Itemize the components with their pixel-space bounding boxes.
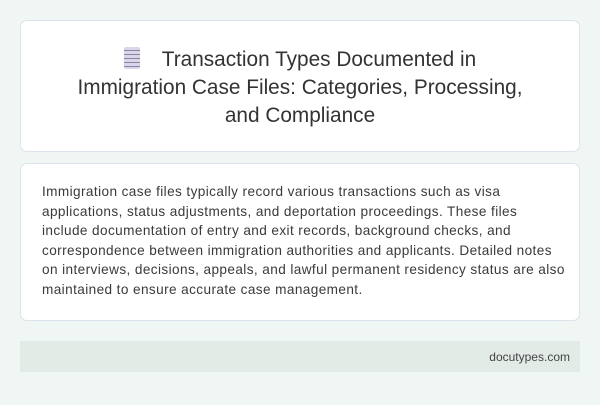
title [78,47,522,127]
text block: on interviews, decisions, appeals, and lawful permanent residency status are also [42,262,565,277]
footer text: docutypes.com [489,350,570,364]
title: Immigration Case Files: Categories, Processing, [78,76,522,99]
panel: description [20,163,580,321]
icon: receipt [124,47,140,69]
title: Transaction Types Documented in [162,48,476,71]
text block: maintained to ensure accurate case management. [42,282,363,297]
panel: title card [20,20,580,152]
text block: include documentation of entry and exit records, background checks, and [42,223,511,238]
footer [20,341,580,372]
text block: correspondence between immigration authorities and applicants. Detailed notes [42,243,552,258]
text block [42,184,565,297]
title: and Compliance [225,104,375,127]
text block: Immigration case files typically record various transactions such as visa [42,184,500,199]
text block: applications, status adjustments, and deportation proceedings. These files [42,204,517,219]
